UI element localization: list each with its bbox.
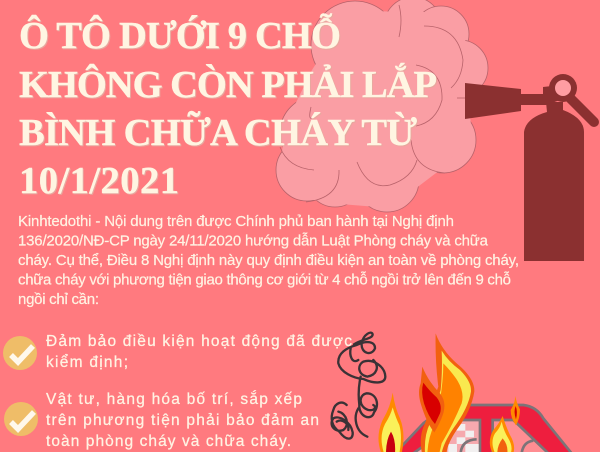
bullet text 2 <box>46 391 319 450</box>
intro text block: chữa cháy với phương tiện giao thông cơ giới từ 4 chỗ ngồi trở lên đến 9 chỗ <box>18 272 511 288</box>
icon: check mark 2 <box>4 402 38 436</box>
intro text block <box>18 213 519 308</box>
right flame <box>490 416 514 452</box>
cloud interior fill <box>280 10 482 208</box>
bullet text 2: Vật tư, hàng hóa bố trí, sắp xếp <box>46 391 302 408</box>
intro text block: cháy. Cụ thể, Điều 8 Nghị định này quy định điều kiện an toàn về phòng cháy, <box>18 252 519 269</box>
title: 10/1/2021 <box>19 160 179 202</box>
icon: smoke cloud <box>276 0 488 212</box>
medium flame <box>419 367 444 432</box>
bullet text 1: Đảm bảo điều kiện hoạt động đã được <box>46 333 352 350</box>
illustration: car on fire <box>378 333 572 452</box>
icon: fire extinguisher <box>465 74 594 261</box>
bullet text 1 <box>46 333 352 371</box>
intro text block: ngồi chỉ cần: <box>18 291 99 308</box>
title <box>19 13 437 202</box>
bullet text 2: toàn phòng cháy và chữa cháy. <box>46 433 291 450</box>
intro text block: Kinhtedothi - Nội dung trên được Chính phủ ban hành tại Nghị định <box>18 213 454 230</box>
left flame <box>378 393 403 452</box>
bullet text 2: trên phương tiện phải bảo đảm an <box>46 412 319 429</box>
title: Ô TÔ DƯỚI 9 CHỖ <box>19 13 341 57</box>
intro text block: 136/2020/NĐ-CP ngày 24/11/2020 hướng dẫn Luật Phòng cháy và chữa <box>18 232 489 250</box>
car body <box>395 405 572 452</box>
large flame <box>421 333 474 452</box>
icon: check mark 1 <box>3 336 37 370</box>
title: BÌNH CHỮA CHÁY TỪ <box>19 110 417 154</box>
bullet text 1: kiểm định; <box>46 354 128 371</box>
small flame <box>511 396 520 425</box>
title: KHÔNG CÒN PHẢI LẮP <box>19 63 437 106</box>
car windows <box>413 420 548 452</box>
icon: scribbled smoke <box>332 333 385 439</box>
